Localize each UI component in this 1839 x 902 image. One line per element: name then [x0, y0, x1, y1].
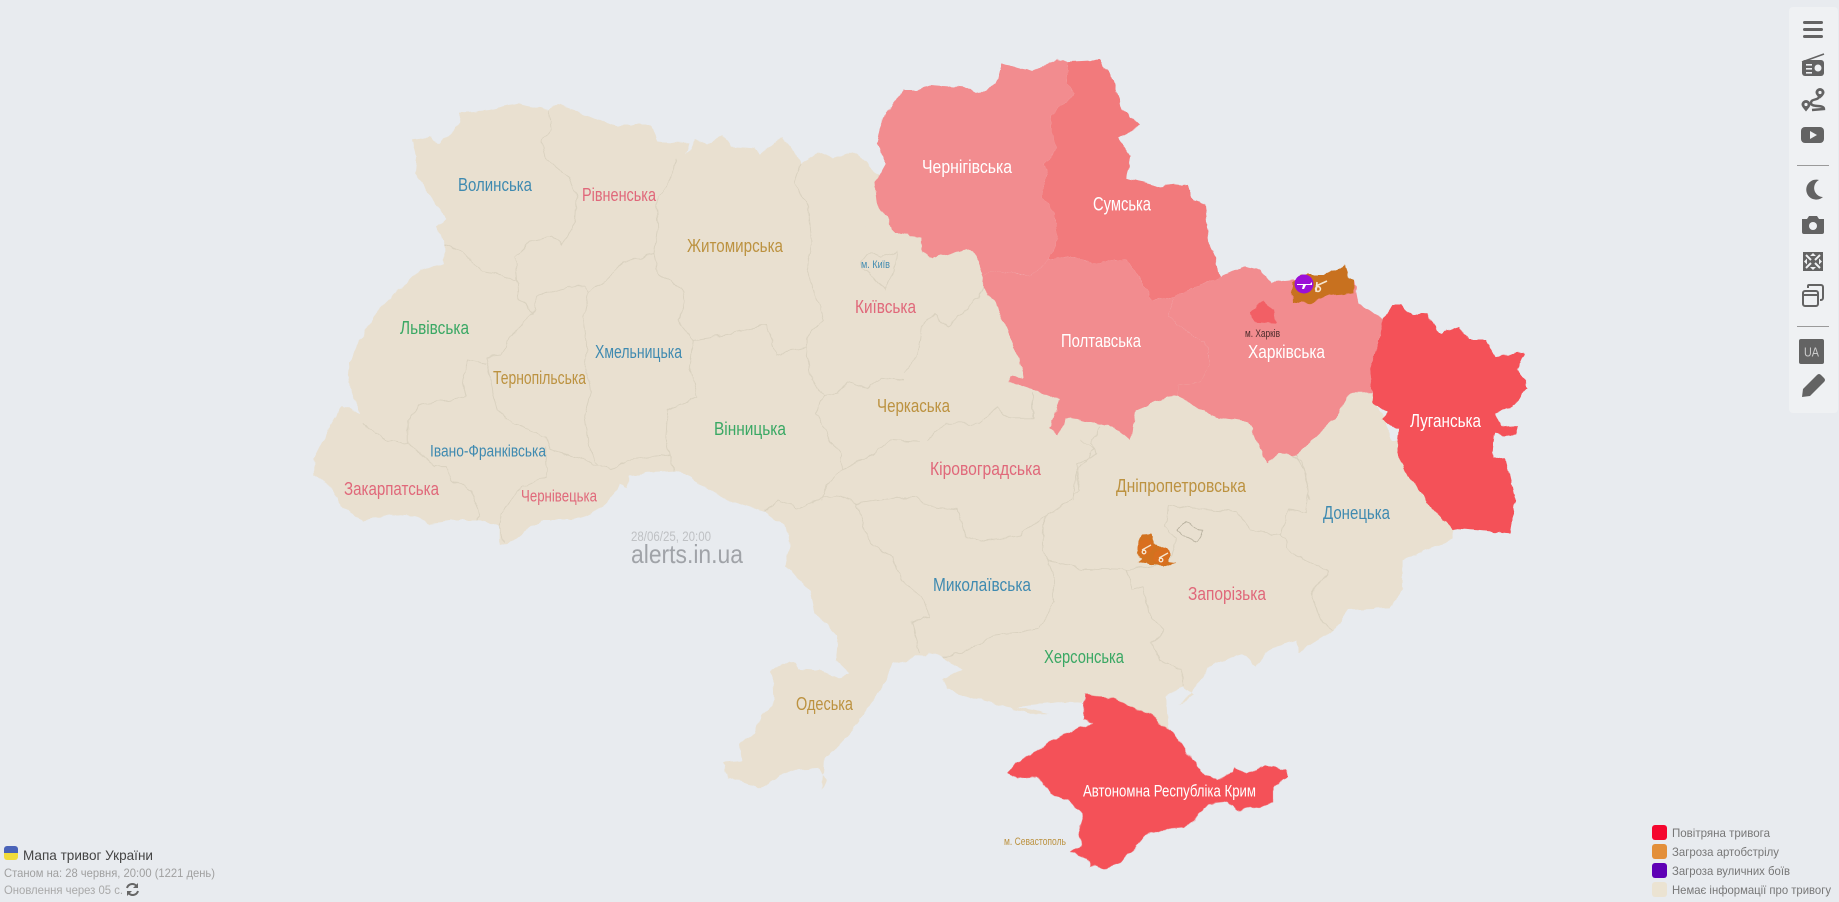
- icon: menu: [1803, 21, 1823, 38]
- icon: Ukrainian flag: [4, 846, 18, 860]
- label: Cherkasy: Черкаська: [877, 396, 951, 416]
- icon: fullscreen: [1803, 252, 1823, 271]
- icon: pencil: [1802, 374, 1825, 397]
- region borders: south: [764, 440, 1334, 687]
- icon: windows: [1803, 285, 1823, 306]
- region: Poltava: [983, 257, 1209, 442]
- label: Kyiv city: м. Київ: [861, 259, 890, 271]
- label: Odesa: Одеська: [796, 694, 854, 714]
- label: Kirovohrad: Кіровоградська: [930, 459, 1042, 479]
- icon: video: [1801, 127, 1824, 143]
- label: Luhansk: Луганська: [1410, 411, 1482, 431]
- label: Chernivtsi: Чернівецька: [521, 486, 597, 506]
- label: Lviv: Львівська: [400, 318, 470, 338]
- legend: [1652, 825, 1831, 897]
- label: Ivano-Frankivsk: Івано-Франківська: [430, 442, 546, 460]
- region: Kharkiv city: [1252, 302, 1276, 323]
- label: Volyn: Волинська: [458, 175, 533, 195]
- icon: refresh: [127, 883, 138, 896]
- label: Kyiv region: Київська: [855, 297, 917, 317]
- icon: radio: [1802, 54, 1824, 76]
- label: Rivne: Рівненська: [582, 185, 657, 205]
- region borders: west: [363, 110, 920, 542]
- icon: moon: [1806, 180, 1823, 200]
- label: Kherson: Херсонська: [1044, 647, 1125, 667]
- icon: street fighting marker: [1294, 274, 1314, 294]
- region labels: [344, 157, 1482, 848]
- label: Sumy: Сумська: [1093, 194, 1151, 216]
- label: Sevastopol: м. Севастополь: [1004, 836, 1066, 848]
- label: Zaporizhzhia: Запорізька: [1188, 584, 1267, 604]
- header info block: [4, 846, 215, 897]
- artillery threat zone: Kharkiv border: [1292, 265, 1354, 303]
- title: Мапа тривог України: [23, 847, 153, 863]
- region borders: centre: [904, 288, 1310, 500]
- region: Luhansk: [1370, 305, 1529, 533]
- legend item: no info: Немає інформації про тривогу: [1672, 883, 1831, 897]
- label: Kharkiv city: м. Харків: [1245, 328, 1280, 340]
- base land: western, central and southern regions: [314, 103, 1453, 790]
- region: Sumy: [1041, 60, 1221, 300]
- watermark site name: alerts.in.ua: [631, 539, 743, 569]
- toolbar panel: [1789, 7, 1838, 413]
- label: Kharkiv: Харківська: [1248, 342, 1326, 362]
- label: Zakarpattia: Закарпатська: [344, 479, 440, 499]
- label: Vinnytsia: Вінницька: [714, 419, 787, 439]
- artillery threat zone: Dnipro: [1136, 534, 1176, 566]
- icon: artillery gun: [1316, 281, 1327, 292]
- icon: route: [1802, 88, 1824, 112]
- alert regions: north and east: [875, 58, 1529, 533]
- region: Crimea: [1009, 693, 1288, 868]
- legend item: air alert: Повітряна тривога: [1672, 826, 1770, 840]
- language button: UA: [1804, 344, 1819, 360]
- language button: [1799, 339, 1824, 364]
- update countdown: Оновлення через 05 с.: [4, 883, 123, 897]
- map of Ukraine: [314, 58, 1529, 868]
- label: Crimea: Автономна Республіка Крим: [1083, 782, 1256, 800]
- label: Chernihiv: Чернігівська: [922, 157, 1013, 177]
- region: Chernihiv: [875, 58, 1075, 277]
- icon: camera: [1802, 216, 1824, 234]
- label: Mykolaiv: Миколаївська: [933, 575, 1032, 595]
- label: Zhytomyr: Житомирська: [687, 236, 784, 256]
- label: Dnipropetrovsk: Дніпропетровська: [1116, 476, 1247, 496]
- legend item: artillery: Загроза артобстрілу: [1672, 845, 1779, 859]
- label: Poltava: Полтавська: [1061, 331, 1142, 351]
- status date: Станом на: 28 червня, 20:00 (1221 день): [4, 866, 215, 880]
- map shapes with jagged outlines: [314, 58, 1529, 868]
- label: Donetsk: Донецька: [1323, 503, 1391, 523]
- label: Khmelnytskyi: Хмельницька: [595, 342, 683, 362]
- icon: artillery guns in Dnipro zone: [1142, 545, 1168, 562]
- watermark date: 28/06/25, 20:00: [631, 528, 711, 544]
- legend item: street fighting: Загроза вуличних боїв: [1672, 864, 1790, 878]
- region: Kharkiv: [1169, 267, 1383, 463]
- label: Ternopil: Тернопільська: [493, 368, 587, 388]
